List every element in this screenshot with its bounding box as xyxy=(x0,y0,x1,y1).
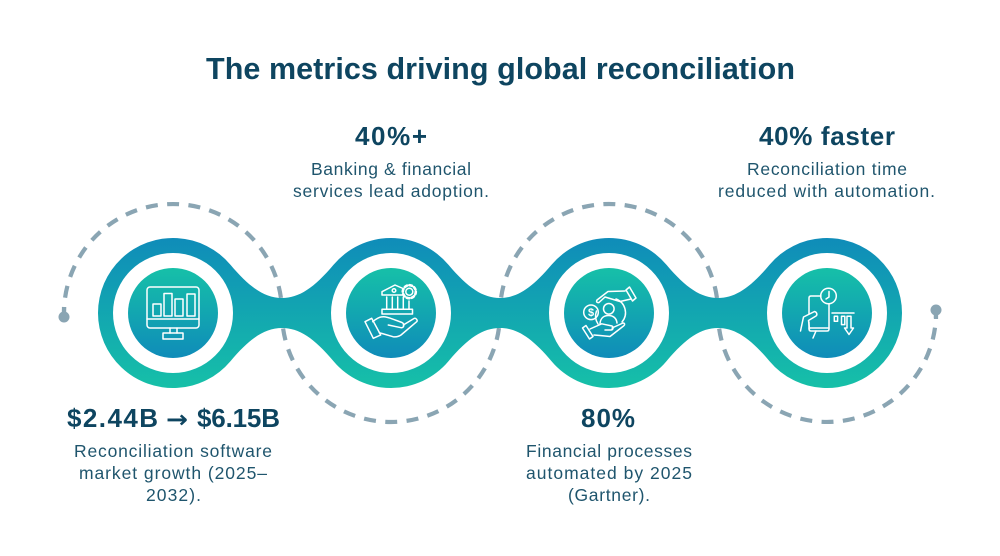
stat: banking adoption: services lead adoption. xyxy=(293,181,489,201)
stat: faster reconciliation: Reconciliation time xyxy=(747,159,907,179)
stat: automated processes xyxy=(526,403,692,505)
stat: market growth: 2032). xyxy=(146,485,201,505)
stat: faster reconciliation xyxy=(718,121,935,201)
node 1: monitor xyxy=(113,253,233,373)
stat: market growth xyxy=(67,403,280,505)
stat: market growth: $6.15B xyxy=(197,403,280,433)
stat: automated processes: Financial processes xyxy=(526,441,692,461)
stat: banking adoption: Banking & financial xyxy=(311,159,471,179)
stat: automated processes: automated by 2025 xyxy=(526,463,692,483)
node 4: phone and clock xyxy=(767,253,887,373)
title: The metrics driving global reconciliation xyxy=(206,52,795,86)
stat: market growth: market growth (2025– xyxy=(79,463,267,483)
node 3: people and money: $ xyxy=(588,307,594,319)
icon: bank and gear on hand xyxy=(365,285,417,338)
icon: phone, clock and falling bars xyxy=(800,288,854,338)
stat: market growth: → xyxy=(166,406,188,434)
icon: hands around person and dollar coin xyxy=(582,287,636,339)
stat: faster reconciliation: reduced with automation. xyxy=(718,181,935,201)
stat: market growth: Reconciliation software xyxy=(74,441,272,461)
node 3: people and money xyxy=(549,253,669,373)
stat: banking adoption xyxy=(293,121,489,201)
connected ring band xyxy=(98,238,902,388)
icon: monitor with bar chart xyxy=(147,287,199,339)
node 2: bank xyxy=(331,253,451,373)
stat: automated processes: (Gartner). xyxy=(568,485,650,505)
dashed serpentine connector xyxy=(58,204,942,422)
stat: faster reconciliation: 40% faster xyxy=(759,121,895,151)
stat: banking adoption: 40%+ xyxy=(355,121,427,151)
stat: automated processes: 80% xyxy=(581,403,635,433)
stat: market growth: $2.44B xyxy=(67,403,158,433)
